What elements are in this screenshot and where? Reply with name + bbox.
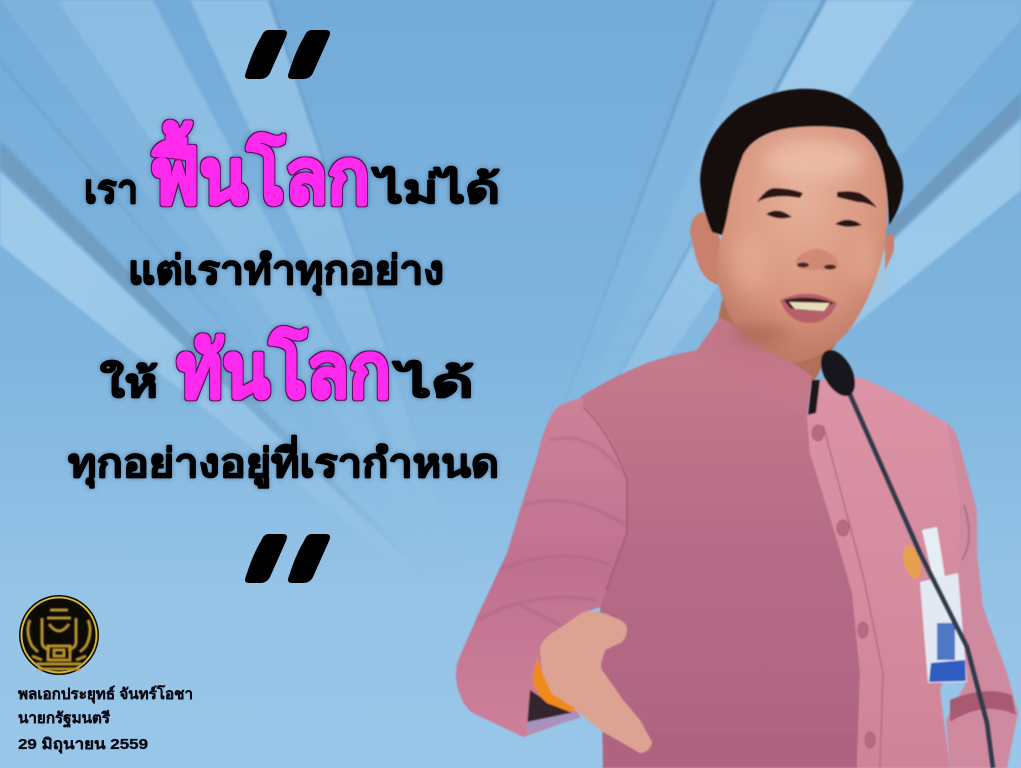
line 2: แต่เราทำทุกอย่าง [128, 249, 444, 296]
hand [540, 612, 652, 753]
caption: title: นายกรัฐมนตรี [18, 710, 111, 728]
line 3 [100, 326, 474, 414]
orange wristband [532, 657, 575, 712]
jacket body left panel [580, 350, 860, 768]
quote text [68, 121, 500, 489]
caption [18, 684, 193, 754]
mouth [780, 294, 837, 323]
emblem seal [19, 595, 99, 675]
portrait of speaker [456, 89, 1018, 768]
face [716, 126, 887, 363]
line 3: ทันโลก [177, 326, 391, 414]
line 4: ทุกอย่างอยู่ที่เรากำหนด [68, 435, 499, 489]
brows and eyes [757, 188, 877, 227]
left sleeve [456, 398, 627, 737]
neck [716, 300, 850, 385]
placket stitching [823, 425, 883, 768]
jacket buttons [812, 425, 875, 748]
line 1: เรา [84, 168, 138, 212]
face shading [730, 142, 877, 345]
pin [900, 544, 924, 580]
caption: date: 29 มิถุนายน 2559 [18, 735, 148, 754]
right sleeve [946, 423, 1018, 768]
nose [796, 249, 838, 270]
ears [690, 212, 894, 285]
line 1 [84, 121, 500, 220]
line 3: ให้ [100, 360, 158, 406]
line 1: ไม่ได้ [371, 166, 500, 212]
line 3: ได้ [391, 360, 474, 406]
closing quotation mark [245, 534, 330, 583]
microphone [814, 344, 993, 768]
dark cuff lining [527, 690, 580, 727]
collar [697, 317, 820, 415]
cuff lilac strip [527, 712, 580, 733]
caption: name: พลเอกประยุทธ์ จันทร์โอชา [18, 684, 193, 704]
line 1: ฟื้นโลก [150, 121, 370, 220]
hair [700, 89, 903, 235]
jacket body right panel [807, 377, 964, 768]
opening quotation mark [245, 30, 330, 79]
ID badge [920, 527, 967, 683]
